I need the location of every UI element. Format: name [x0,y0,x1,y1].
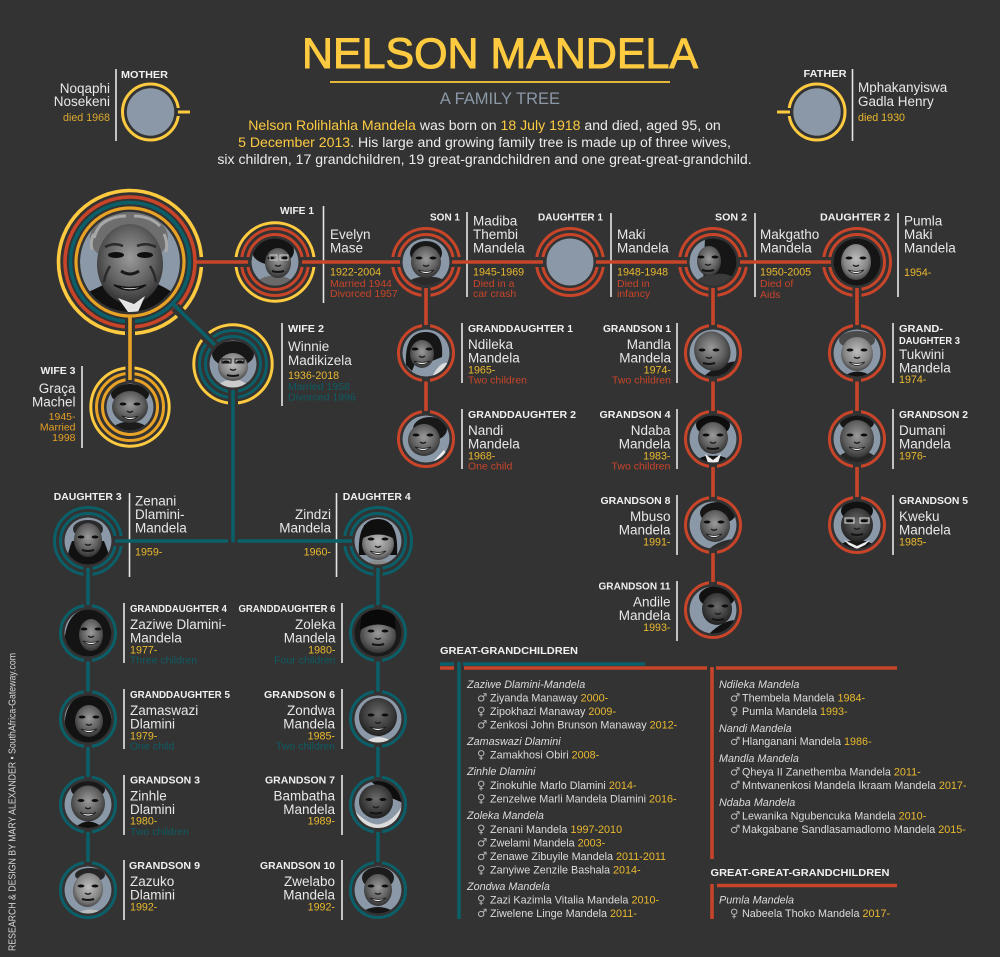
bars [712,884,897,919]
text: Three children [130,654,197,666]
text: GRANDSON 11 [598,580,671,592]
Mandla Mandela descendants: Qheya II Zanethemba Mandela 2011- [742,766,921,778]
Zoleka Mandela descendants: ♂ [477,849,487,863]
portrait [686,408,740,470]
text [598,580,677,641]
text: Winnie [288,339,329,354]
text: Mandela [468,437,520,452]
grandson 4: Ndaba Mandela [600,408,740,472]
text: 1992- [308,901,335,913]
Zondwa Mandela descendants: ♂ [477,906,487,920]
text: 1980- [130,816,158,828]
text: Zamaswazi [130,703,198,718]
Zondwa Mandela descendants: Ziwelene Linge Mandela 2011- [490,908,637,920]
Zoleka Mandela descendants: ♂ [477,836,487,850]
text [264,689,342,752]
text: infancy [617,288,651,300]
Zamaswazi Dlamini descendants: ♀ [477,748,485,762]
father: died 1930 [858,112,905,124]
text: 1922-2004 [330,266,381,278]
text: GRANDSON 2 [899,409,968,421]
wife 1: Evelyn Mase [232,205,398,303]
portrait [60,774,116,836]
mother: Nosekeni [54,94,110,109]
Zaziwe Dlamini-Mandela descendants: ♂ [477,718,487,732]
Zoleka Mandela descendants: Zenani Mandela 1997-2010 [490,824,622,836]
text: DAUGHTER 4 [343,491,411,503]
text: 1980- [308,644,336,656]
grandson 10: Zwelabo Mandela [260,859,406,920]
mother: died 1968 [63,112,110,124]
text [430,212,525,300]
text: DAUGHTER 3 [899,335,960,347]
portrait [398,322,454,384]
text: Mandela [899,437,951,452]
text: Pumla [904,214,943,228]
text: GRANDDAUGHTER 2 [468,409,576,421]
text: Mandela [904,241,956,256]
intro text [217,117,752,167]
portrait [389,228,463,299]
granddaughter 4: Zaziwe Dlamini-Mandela [60,602,227,666]
text: Zondwa [287,703,335,718]
text: One child [468,460,513,472]
Ndaba Mandela descendants: Makgabane Sandlasamadlomo Mandela 2015- [742,824,966,836]
text: Machel [32,394,76,410]
text [600,409,677,472]
text: Two children [612,374,671,386]
Ndaba Mandela descendants: Lewanika Ngubencuka Mandela 2010- [742,810,927,822]
Nandi Mandela descendants: ♂ [730,734,740,748]
grandson 8: Mbuso Mandela [600,494,740,556]
text: Dumani [899,423,946,438]
Ndileka Mandela descendants: ♂ [730,690,740,704]
text: GRANDDAUGHTER 6 [238,603,336,615]
portrait [830,408,884,470]
Zoleka Mandela descendants: ♀ [477,822,485,836]
Ndileka Mandela descendants [719,679,865,718]
Zoleka Mandela descendants: Zanyiwe Zenzile Bashala 2014- [490,864,641,876]
text: Divorced 1957 [330,288,398,300]
portrait [686,494,740,556]
text: 1977- [130,644,158,656]
text: Died in a [473,278,515,290]
Zaziwe Dlamini-Mandela descendants [466,679,678,732]
text: WIFE 2 [288,323,324,335]
text: 1989- [308,816,335,828]
father: FATHER [804,68,847,80]
text: Dlamini [130,717,175,732]
text: Zenani [135,494,176,509]
text: 1974- [644,364,671,376]
text [32,365,82,448]
text [603,323,677,386]
portrait [350,774,406,836]
text: GRANDSON 10 [260,860,335,872]
Ndaba Mandela descendants [719,797,966,836]
red connectors [195,262,857,582]
text: Divorced 1996 [288,392,356,404]
text: Two children [468,374,527,386]
text: Mandela [899,360,951,376]
text [600,495,677,555]
text: SON 1 [430,212,460,224]
text: DAUGHTER 1 [538,212,603,224]
text: 1968- [468,450,496,462]
text: Mandela [284,631,336,646]
text: Two children [612,460,671,472]
text: Aids [760,289,780,301]
portrait [830,494,884,552]
daughter 2: Pumla Maki Mandela [820,212,956,299]
text: Ndileka [468,337,514,352]
portrait [398,408,454,466]
text: 1993- [643,622,671,634]
Zaziwe Dlamini-Mandela descendants: ♂ [477,690,487,704]
text: GRANDSON 1 [603,323,671,335]
text: GRANDSON 7 [265,774,335,786]
Ndileka Mandela descendants: Pumla Mandela 1993- [742,706,848,718]
grandson 3: Zinhle Dlamini [60,774,200,838]
Zinhle Dlamini descendants [466,766,677,806]
grandson 6: Zondwa Mandela [264,688,406,752]
text: 1945-1969 [473,266,524,278]
mother: Noqaphi [60,81,110,96]
text: 1945- [49,411,76,423]
Zamaswazi Dlamini descendants: Zamakhosi Obiri 2008- [490,750,600,762]
Zaziwe Dlamini-Mandela descendants: Ziyanda Manaway 2000- [490,692,609,704]
text: 1976- [899,450,927,462]
wife 3: Graça Machel [32,364,169,448]
text: 1985- [308,730,335,742]
daughter 3: Zenani Dlamini-Mandela [54,491,187,578]
text: Mandela [617,241,669,256]
Mandla Mandela descendants: Mandla Mandela [719,753,799,765]
text [124,603,227,666]
text: 1991- [643,536,671,548]
Mandla Mandela descendants: Mntwanenkosi Mandela Ikraam Mandela 2017- [742,780,967,792]
text: WIFE 3 [40,365,76,377]
intro text: 5 December 2013. His large and growing family tree is made up of three wives, [238,134,731,150]
granddaughter 5: Zamaswazi Dlamini [60,688,230,752]
Nandi Mandela descendants: Nandi Mandela [719,723,792,735]
text: Mandela [283,888,335,903]
mother: MOTHER [121,69,168,81]
portrait [194,325,272,407]
text: Mandela [279,520,331,536]
text: 1965- [468,364,496,376]
Pumla Mandela descendants: ♀ [730,906,738,920]
text [893,323,960,386]
text: Zwelabo [284,874,335,889]
text [820,212,956,297]
text: Mandela [619,437,671,452]
text: 1974- [899,374,927,386]
text [282,323,356,406]
text: 1979- [130,730,158,742]
text: Bambatha [273,788,335,804]
text: Graça [39,381,76,396]
text: Mandela [283,802,335,817]
Pumla Mandela descendants: Pumla Mandela [719,894,794,906]
text: Died in [617,278,650,290]
text: 1998 [52,432,76,444]
daughter 1: Maki Mandela [533,212,669,300]
subtitle: A FAMILY TREE [440,90,560,108]
Zoleka Mandela descendants: Zenawe Zibuyile Mandela 2011-2011 [490,851,666,863]
text: Two children [130,826,189,838]
text: Evelyn [330,227,371,242]
Zondwa Mandela descendants: Zazi Kazimla Vitalia Mandela 2010- [490,894,659,906]
text: 1948-1948 [617,266,668,278]
text [124,689,230,752]
Pumla Mandela descendants [719,894,890,920]
intro text: six children, 17 grandchildren, 19 great-grandchildren and one great-great-grandchild. [217,151,752,167]
panel: great-great-grandchildren [710,867,897,920]
text: Maki [904,227,933,242]
Zinhle Dlamini descendants: Zinokuhle Marlo Dlamini 2014- [490,780,637,792]
portrait [341,508,412,578]
text: Mandela [473,241,525,256]
text: GRANDSON 9 [129,860,200,872]
teal connectors [88,303,378,862]
portrait [686,322,740,384]
Mandla Mandela descendants [719,753,967,792]
father: Mphakanyiswa [858,80,948,95]
text: Andile [633,594,670,610]
Zoleka Mandela descendants [466,810,666,876]
Nelson Mandela portrait with rings [58,190,205,337]
text [260,860,342,920]
text: 1960- [304,546,331,558]
father [777,68,948,141]
text: 1954- [904,267,932,279]
text: Kweku [899,509,940,524]
granddaughter 1: Ndileka Mandela [398,322,573,386]
daughter 4: Zindzi Mandela [279,491,412,578]
text: Maki [617,227,646,242]
text: Four children [274,654,336,666]
Ndileka Mandela descendants: Ndileka Mandela [719,679,799,691]
text: Mandela [619,523,671,538]
text: Mase [330,241,363,256]
text [124,860,200,920]
portrait [60,859,116,918]
grandson 7: Bambatha Mandela [265,774,406,836]
Ndaba Mandela descendants: ♂ [730,808,740,822]
Nandi Mandela descendants [719,723,872,748]
Zaziwe Dlamini-Mandela descendants: Zaziwe Dlamini-Mandela [466,679,585,691]
text: 1959- [135,546,163,558]
granddaughter 3: Tukwini Mandela [830,322,960,386]
Zinhle Dlamini descendants: ♀ [477,778,485,792]
Mandla Mandela descendants: ♂ [730,764,740,778]
Ndileka Mandela descendants: Thembela Mandela 1984- [742,692,865,704]
text: 1992- [130,901,158,913]
text: Mandela [899,523,951,538]
text: Madikizela [288,353,352,368]
Ndaba Mandela descendants: ♂ [730,822,740,836]
Zaziwe Dlamini-Mandela descendants: Zenkosi John Brunson Manaway 2012- [490,720,678,732]
text: One child [130,740,175,752]
text: Married 1958 [288,381,350,393]
text: Ndaba [631,423,671,438]
text: DAUGHTER 2 [820,212,890,224]
text: Madiba [473,214,518,228]
bars [440,662,897,919]
text [124,774,200,838]
text: GRANDSON 3 [130,774,200,786]
text: GRANDSON 4 [600,409,671,421]
Nandi Mandela descendants: Hlanganani Mandela 1986- [742,736,872,748]
text: Zinhle [130,788,167,804]
mother [54,69,190,141]
text: Thembi [473,227,518,242]
text: DAUGHTER 3 [54,491,122,503]
Ndileka Mandela descendants: ♀ [730,704,738,718]
text: GRANDSON 8 [600,495,671,507]
text: GRANDDAUGHTER 4 [130,603,227,615]
text [279,491,411,577]
text: Zoleka [295,617,336,632]
text [462,323,573,386]
text [54,491,187,577]
Zaziwe Dlamini-Mandela descendants: Zipokhazi Manaway 2009- [490,706,616,718]
Zondwa Mandela descendants [466,881,659,920]
grandson 1: Mandla Mandela [603,322,740,386]
portrait [686,579,740,638]
text: 1985- [899,536,927,548]
text [238,603,342,666]
son 1: Madiba Thembi Mandela [389,212,525,300]
title: NELSON MANDELA [302,30,698,78]
grandson 5: Kweku Mandela [830,494,968,555]
credit: RESEARCH & DESIGN BY MARY ALEXANDER • SouthAfrica-Gateway.com [8,653,18,951]
text [265,774,342,835]
portrait [232,223,318,301]
intro text: Nelson Rolihlahla Mandela was born on 18 July 1918 and died, aged 95, on [248,117,721,133]
granddaughter 2: Nandi Mandela [398,408,576,472]
text: Tukwini [899,347,944,362]
grandson 9: Zazuko Dlamini [60,859,200,920]
panel: great-grandchildren [440,645,967,920]
portrait [54,508,125,578]
text: Zindzi [295,507,331,522]
text: 1950-2005 [760,266,811,278]
text: Mandela [619,608,671,623]
text: Dlamini- [135,507,185,522]
Zinhle Dlamini descendants: Zinhle Dlamini [466,766,536,778]
portrait [830,322,884,384]
text: SON 2 [715,212,747,224]
text: Mandla [627,337,671,352]
portrait [820,228,890,299]
Pumla Mandela descendants: Nabeela Thoko Mandela 2017- [742,908,890,920]
portrait [350,859,406,918]
orange connector to wife 3 [128,316,132,380]
text: WIFE 1 [280,205,314,217]
Zoleka Mandela descendants: ♀ [477,862,485,876]
text [893,495,968,555]
portrait [91,364,169,446]
Zinhle Dlamini descendants: ♀ [477,792,485,806]
text: Died of [760,278,793,290]
text: Zaziwe Dlamini- [130,617,226,632]
text [462,409,576,472]
text: 1983- [643,450,671,462]
Zoleka Mandela descendants: Zoleka Mandela [466,810,544,822]
text: Makgatho [760,227,819,242]
text: Mandela [135,520,187,536]
son 2: Makgatho Mandela [676,212,819,301]
portrait [350,602,406,664]
portrait [60,688,116,750]
text: Mandela [619,351,671,366]
text: car crash [473,288,516,300]
text: Mandela [760,241,812,256]
text [893,409,968,469]
text: Mandela [468,351,520,366]
heading: GREAT-GREAT-GRANDCHILDREN [710,867,890,879]
text: Dlamini [130,888,175,903]
text: Married 1944 [330,278,392,290]
grandson 2: Dumani Mandela [830,408,968,470]
Zoleka Mandela descendants: Zwelami Mandela 2003- [490,838,606,850]
text: 1936-2018 [288,370,339,382]
text: Married [40,422,76,434]
wife 2: Winnie Madikizela [194,323,356,407]
granddaughter 6: Zoleka Mandela [238,602,406,666]
Mandla Mandela descendants: ♂ [730,778,740,792]
text: Zazuko [130,874,174,889]
portrait [60,602,116,664]
Zondwa Mandela descendants: Zondwa Mandela [466,881,550,893]
text [538,212,669,300]
text: Nandi [468,423,503,438]
portrait [676,228,750,299]
text: GRANDDAUGHTER 5 [130,689,230,701]
Zondwa Mandela descendants: ♀ [477,892,485,906]
Zamaswazi Dlamini descendants: Zamaswazi Dlamini [466,736,561,748]
text: GRANDSON 5 [899,495,968,507]
portrait [350,688,406,750]
father: Gadla Henry [858,94,934,109]
Ndaba Mandela descendants: Ndaba Mandela [719,797,795,809]
text: Mandela [130,631,182,646]
grandson 11: Andile Mandela [598,579,740,641]
text: Dlamini [130,802,175,817]
heading: GREAT-GRANDCHILDREN [440,645,578,657]
rings and empty portrait [533,228,607,296]
Zamaswazi Dlamini descendants [466,736,600,762]
text: GRANDSON 6 [264,689,335,701]
text: Mandela [283,717,335,732]
text: Two children [276,740,335,752]
text [715,212,819,301]
Zinhle Dlamini descendants: Zenzelwe Marli Mandela Dlamini 2016- [490,794,677,806]
text: Mbuso [630,509,670,524]
text: GRANDDAUGHTER 1 [468,323,573,335]
Zaziwe Dlamini-Mandela descendants: ♀ [477,704,485,718]
text [280,205,398,303]
text: GRAND- [899,323,944,335]
